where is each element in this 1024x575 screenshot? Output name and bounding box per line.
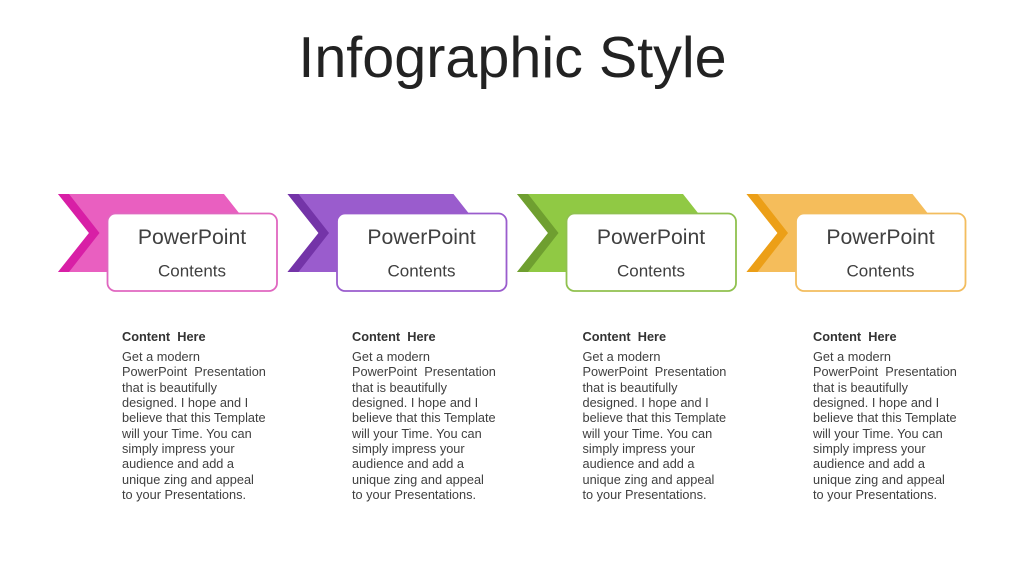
label 2: PowerPoint	[367, 226, 476, 249]
label 1	[138, 226, 246, 280]
label 2: Contents	[387, 262, 456, 280]
banner 4: orange	[746, 194, 966, 291]
label box 2	[337, 214, 506, 291]
label 3	[597, 226, 705, 280]
text block 3: Content Here	[582, 329, 666, 344]
chevron 2	[288, 194, 329, 272]
label 1: Contents	[158, 262, 226, 280]
ribbon 4	[746, 194, 928, 272]
text block 4: Content Here	[813, 329, 897, 344]
chevron 1	[58, 194, 100, 272]
ribbon 1	[58, 194, 239, 272]
label 2	[367, 226, 476, 280]
banner 3: green	[517, 194, 736, 291]
text block 2: Get a modern PowerPoint Presentation that is beautifully designed. I hope and I believe that this Template will your Time. You can simply impress your audience and add a unique zing and appeal to your Presentations.	[352, 349, 496, 502]
text block 1: Content Here	[122, 329, 206, 344]
chevron 3	[517, 194, 558, 272]
ribbon 3	[517, 194, 698, 272]
text block 3: Get a modern PowerPoint Presentation that is beautifully designed. I hope and I believe that this Template will your Time. You can simply impress your audience and add a unique zing and appeal to your Presentations.	[582, 349, 726, 502]
ribbon 2	[288, 194, 468, 272]
label box 4	[796, 214, 966, 291]
chevron 4	[746, 194, 788, 272]
banner 1: pink	[58, 194, 277, 291]
text block 2: Content Here	[352, 329, 436, 344]
title: Infographic Style	[298, 26, 727, 90]
label 1: PowerPoint	[138, 226, 246, 249]
label box 1	[108, 214, 277, 291]
text block 4: Get a modern PowerPoint Presentation that is beautifully designed. I hope and I believe that this Template will your Time. You can simply impress your audience and add a unique zing and appeal to your Presentations.	[813, 349, 957, 502]
label 4	[826, 226, 935, 280]
label 3: Contents	[617, 262, 685, 280]
label 4: PowerPoint	[826, 226, 935, 249]
text block 1: Get a modern PowerPoint Presentation that is beautifully designed. I hope and I believe that this Template will your Time. You can simply impress your audience and add a unique zing and appeal to your Presentations.	[122, 349, 266, 502]
label 4: Contents	[846, 262, 915, 280]
label 3: PowerPoint	[597, 226, 705, 249]
banner 2: purple	[288, 194, 506, 291]
label box 3	[566, 214, 736, 291]
